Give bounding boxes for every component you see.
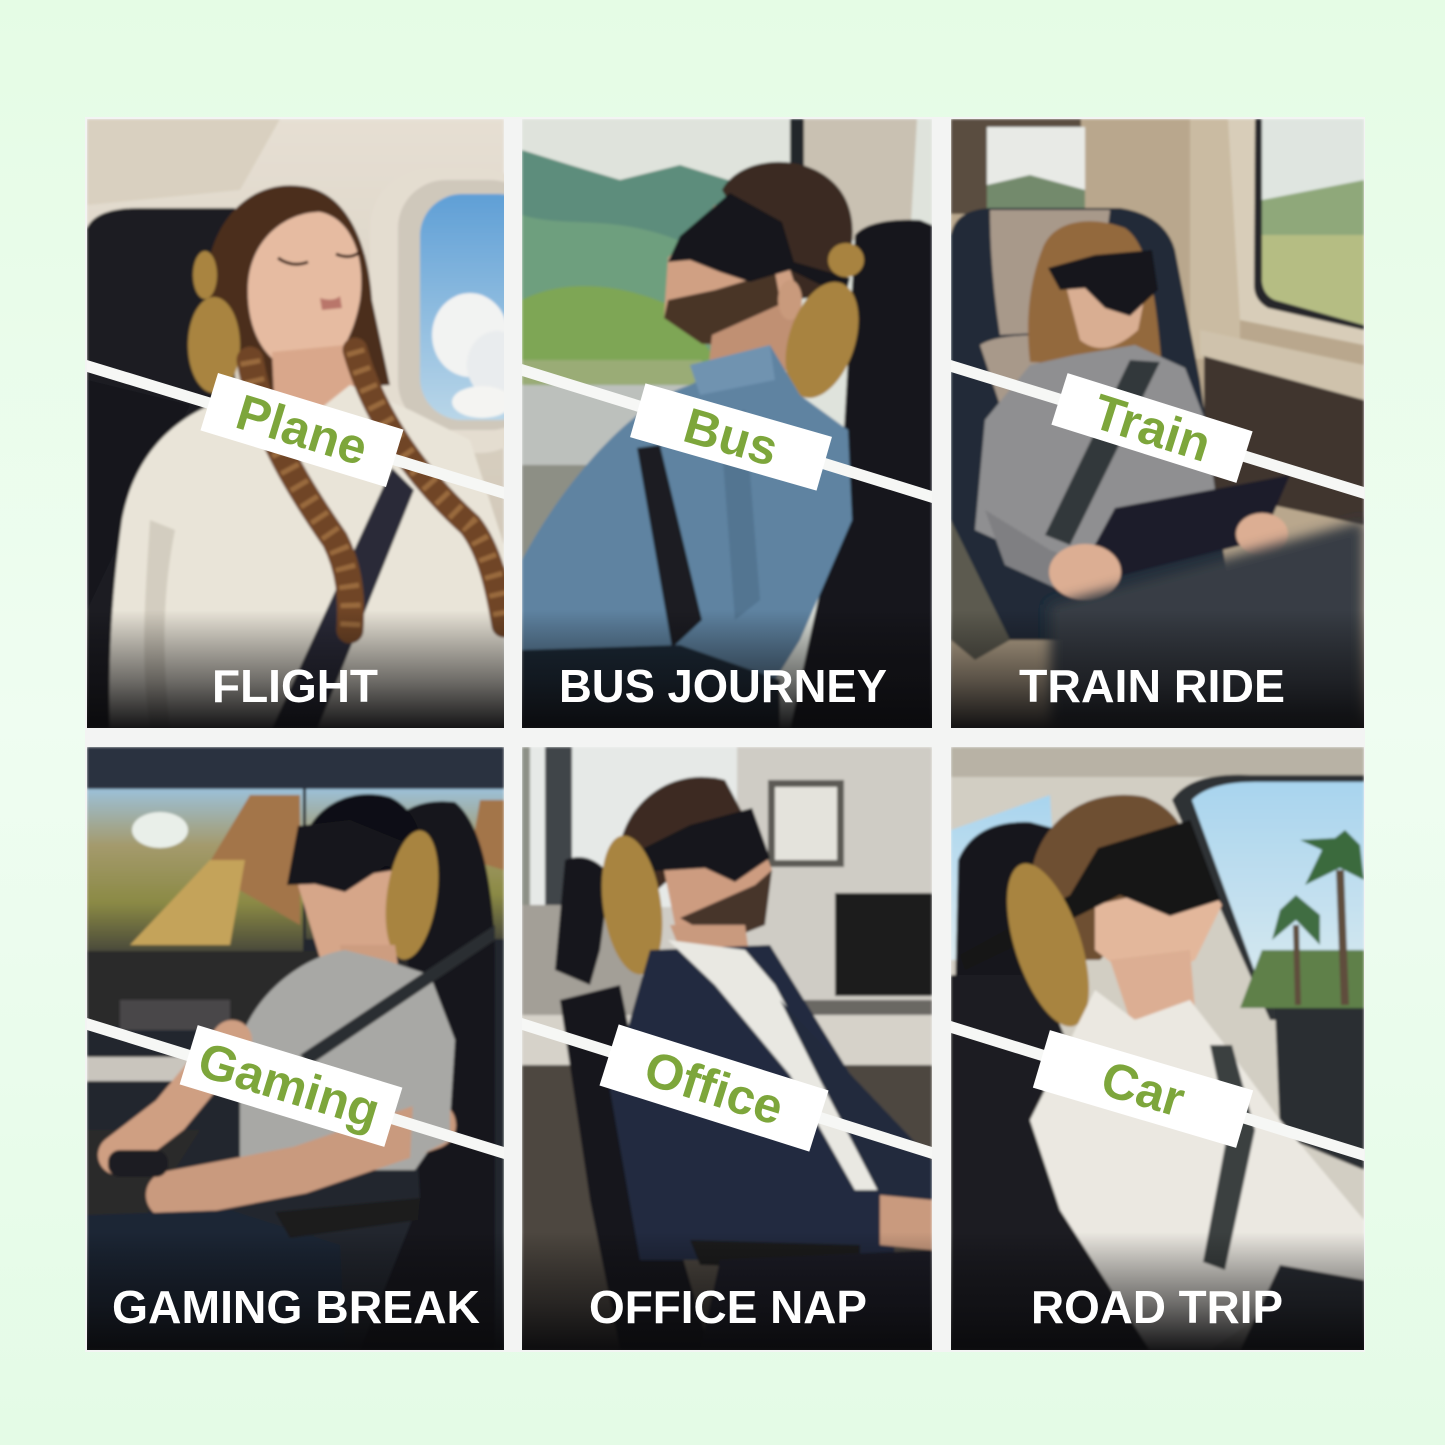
label: Office: Office (638, 1040, 790, 1136)
panel: flight (87, 119, 540, 728)
diagonal stripe (951, 360, 1364, 499)
label: Bus: Bus (678, 397, 784, 477)
label: Train (1051, 372, 1253, 484)
label: Car (1033, 1030, 1253, 1148)
diagonal stripe (951, 1021, 1364, 1161)
label: Plane (200, 373, 404, 487)
panel: office nap (522, 747, 932, 1350)
caption: BUS JOURNEY: BUS JOURNEY (559, 660, 887, 712)
caption: OFFICE NAP: OFFICE NAP (589, 1281, 867, 1333)
label: Plane: Plane (230, 384, 374, 476)
panel: gaming break (87, 747, 504, 1350)
caption: TRAIN RIDE: TRAIN RIDE (1019, 660, 1285, 712)
label: Bus (630, 383, 832, 491)
label: Train: Train (1087, 383, 1217, 473)
label: Office (599, 1024, 829, 1152)
caption: FLIGHT: FLIGHT (212, 660, 378, 712)
diagonal stripe (522, 364, 932, 503)
diagonal stripe (522, 1018, 932, 1159)
label: Gaming: Gaming (192, 1031, 386, 1139)
panel: road trip (951, 747, 1364, 1350)
caption: ROAD TRIP: ROAD TRIP (1031, 1281, 1283, 1333)
label: Car: Car (1095, 1050, 1191, 1128)
white photo grid backing (85, 117, 1365, 1352)
panel: bus journey (522, 119, 932, 728)
diagonal stripe (87, 1018, 504, 1159)
diagonal stripe (87, 360, 504, 499)
caption: GAMING BREAK: GAMING BREAK (112, 1281, 480, 1333)
panel: train ride (951, 119, 1364, 728)
